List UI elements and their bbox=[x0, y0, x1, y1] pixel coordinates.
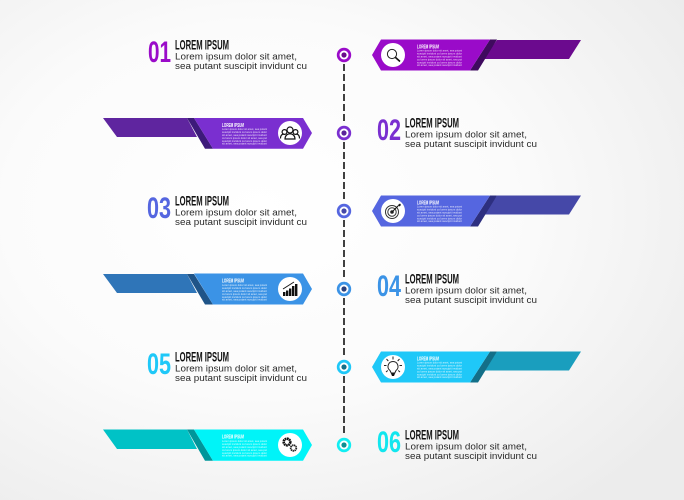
step 04 banner: LOREM IPSUM bbox=[222, 278, 244, 284]
step 02 banner: sit amet, sea putant suscipit invidunt bbox=[222, 142, 267, 146]
step 04 banner: Lorem ipsum dolor sit amet, sea putant bbox=[222, 283, 267, 287]
step 02 banner: sit amet, sea putant suscipit invidunt bbox=[222, 133, 267, 137]
step 03 banner: LOREM IPSUM bbox=[417, 200, 439, 206]
step 06 text: LOREM IPSUM bbox=[405, 426, 459, 442]
step 06 banner: LOREM IPSUM bbox=[222, 434, 244, 440]
step 01 banner: suscipit invidunt cu lorem ipsum dolor bbox=[417, 52, 462, 56]
step 05 text: LOREM IPSUM bbox=[175, 348, 229, 364]
step 04 text: 04 bbox=[377, 270, 401, 303]
step 05 text: Lorem ipsum dolor sit amet, bbox=[175, 363, 297, 374]
step 05 text bbox=[147, 348, 307, 384]
step 01 text bbox=[148, 36, 307, 72]
step 01 banner: Lorem ipsum dolor sit amet, sea putant bbox=[417, 48, 462, 52]
step 02 timeline node bbox=[337, 126, 351, 140]
step 01 text: sea putant suscipit invidunt cu bbox=[175, 61, 307, 72]
step 03 banner: cu lorem ipsum dolor sit amet, sea put bbox=[417, 214, 462, 218]
step 05 banner: cu lorem ipsum dolor sit amet, sea put bbox=[417, 370, 462, 374]
step 02 banner: LOREM IPSUM bbox=[222, 123, 244, 129]
step 01 text: Lorem ipsum dolor sit amet, bbox=[175, 51, 297, 62]
step 05 banner bbox=[372, 352, 581, 382]
step 02 text: 02 bbox=[377, 114, 401, 147]
step 05 banner: sit amet, sea putant suscipit invidunt bbox=[417, 375, 462, 379]
step 03 text: sea putant suscipit invidunt cu bbox=[175, 217, 307, 228]
step 03 text: Lorem ipsum dolor sit amet, bbox=[175, 207, 297, 218]
step 01 banner: suscipit invidunt cu lorem ipsum dolor bbox=[417, 60, 462, 64]
step 06 banner: sit amet, sea putant suscipit invidunt bbox=[222, 454, 267, 458]
step 03 banner: sit amet, sea putant suscipit invidunt bbox=[417, 219, 462, 223]
step 01 banner: LOREM IPSUM bbox=[417, 44, 439, 50]
step 02 banner: suscipit invidunt cu lorem ipsum dolor bbox=[222, 130, 267, 134]
step 04 banner bbox=[103, 274, 312, 304]
step 02 banner: suscipit invidunt cu lorem ipsum dolor bbox=[222, 139, 267, 143]
step 06 timeline node bbox=[337, 438, 351, 452]
icon: target bbox=[381, 199, 405, 223]
icon: gears bbox=[278, 433, 302, 457]
step 06 banner: suscipit invidunt cu lorem ipsum dolor bbox=[222, 442, 267, 446]
step 03 banner: suscipit invidunt cu lorem ipsum dolor bbox=[417, 216, 462, 220]
step 05 banner: LOREM IPSUM bbox=[417, 356, 439, 362]
icon: people bbox=[278, 121, 302, 145]
step 06 banner: sit amet, sea putant suscipit invidunt bbox=[222, 445, 267, 449]
step 05 timeline node bbox=[337, 360, 351, 374]
step 06 text: 06 bbox=[377, 426, 401, 459]
step 03 banner: sit amet, sea putant suscipit invidunt bbox=[417, 210, 462, 214]
step 04 banner: sit amet, sea putant suscipit invidunt bbox=[222, 298, 267, 302]
step 03 text: 03 bbox=[147, 192, 171, 225]
step 03 text: LOREM IPSUM bbox=[175, 192, 229, 208]
step 02 text: LOREM IPSUM bbox=[405, 114, 459, 130]
step 04 banner: suscipit invidunt cu lorem ipsum dolor bbox=[222, 295, 267, 299]
step 02 text bbox=[377, 114, 537, 150]
step 01 text: LOREM IPSUM bbox=[175, 36, 229, 52]
step 04 text: Lorem ipsum dolor sit amet, bbox=[405, 285, 527, 296]
step 01 banner: sit amet, sea putant suscipit invidunt bbox=[417, 63, 462, 67]
step 06 text: sea putant suscipit invidunt cu bbox=[405, 451, 537, 462]
icon: magnifier bbox=[381, 43, 405, 67]
step 03 text bbox=[147, 192, 307, 228]
step 04 text: sea putant suscipit invidunt cu bbox=[405, 295, 537, 306]
step 05 text: 05 bbox=[147, 348, 171, 381]
step 01 timeline node bbox=[337, 48, 351, 62]
timeline dashed line bbox=[343, 64, 345, 435]
step 01 banner: cu lorem ipsum dolor sit amet, sea put bbox=[417, 58, 462, 62]
step 03 banner bbox=[372, 196, 581, 226]
step 05 banner: suscipit invidunt cu lorem ipsum dolor bbox=[417, 372, 462, 376]
step 06 text bbox=[377, 426, 537, 462]
step 01 banner bbox=[372, 40, 581, 70]
step 03 banner: suscipit invidunt cu lorem ipsum dolor bbox=[417, 208, 462, 212]
step 03 timeline node bbox=[337, 204, 351, 218]
step 04 banner: sit amet, sea putant suscipit invidunt bbox=[222, 289, 267, 293]
step 02 text: Lorem ipsum dolor sit amet, bbox=[405, 129, 527, 140]
step 06 banner: Lorem ipsum dolor sit amet, sea putant bbox=[222, 439, 267, 443]
step 06 banner: cu lorem ipsum dolor sit amet, sea put bbox=[222, 448, 267, 452]
step 01 text: 01 bbox=[148, 36, 171, 69]
step 06 banner: suscipit invidunt cu lorem ipsum dolor bbox=[222, 451, 267, 455]
step 02 banner bbox=[103, 118, 312, 149]
step 04 banner: cu lorem ipsum dolor sit amet, sea put bbox=[222, 292, 267, 296]
step 05 banner: Lorem ipsum dolor sit amet, sea putant bbox=[417, 360, 462, 364]
step 02 banner: cu lorem ipsum dolor sit amet, sea put bbox=[222, 136, 267, 140]
step 04 text bbox=[377, 270, 537, 306]
step 02 banner: Lorem ipsum dolor sit amet, sea putant bbox=[222, 127, 267, 131]
step 06 banner bbox=[103, 430, 312, 461]
step 03 banner: Lorem ipsum dolor sit amet, sea putant bbox=[417, 204, 462, 208]
step 02 text: sea putant suscipit invidunt cu bbox=[405, 139, 537, 150]
step 05 banner: sit amet, sea putant suscipit invidunt bbox=[417, 366, 462, 370]
step 04 timeline node bbox=[337, 282, 351, 296]
step 05 banner: suscipit invidunt cu lorem ipsum dolor bbox=[417, 364, 462, 368]
step 01 banner: sit amet, sea putant suscipit invidunt bbox=[417, 54, 462, 58]
step 06 text: Lorem ipsum dolor sit amet, bbox=[405, 441, 527, 452]
step 04 banner: suscipit invidunt cu lorem ipsum dolor bbox=[222, 286, 267, 290]
step 05 text: sea putant suscipit invidunt cu bbox=[175, 373, 307, 384]
icon: bar chart bbox=[278, 277, 302, 301]
step 04 text: LOREM IPSUM bbox=[405, 270, 459, 286]
icon: light bulb bbox=[381, 355, 405, 379]
